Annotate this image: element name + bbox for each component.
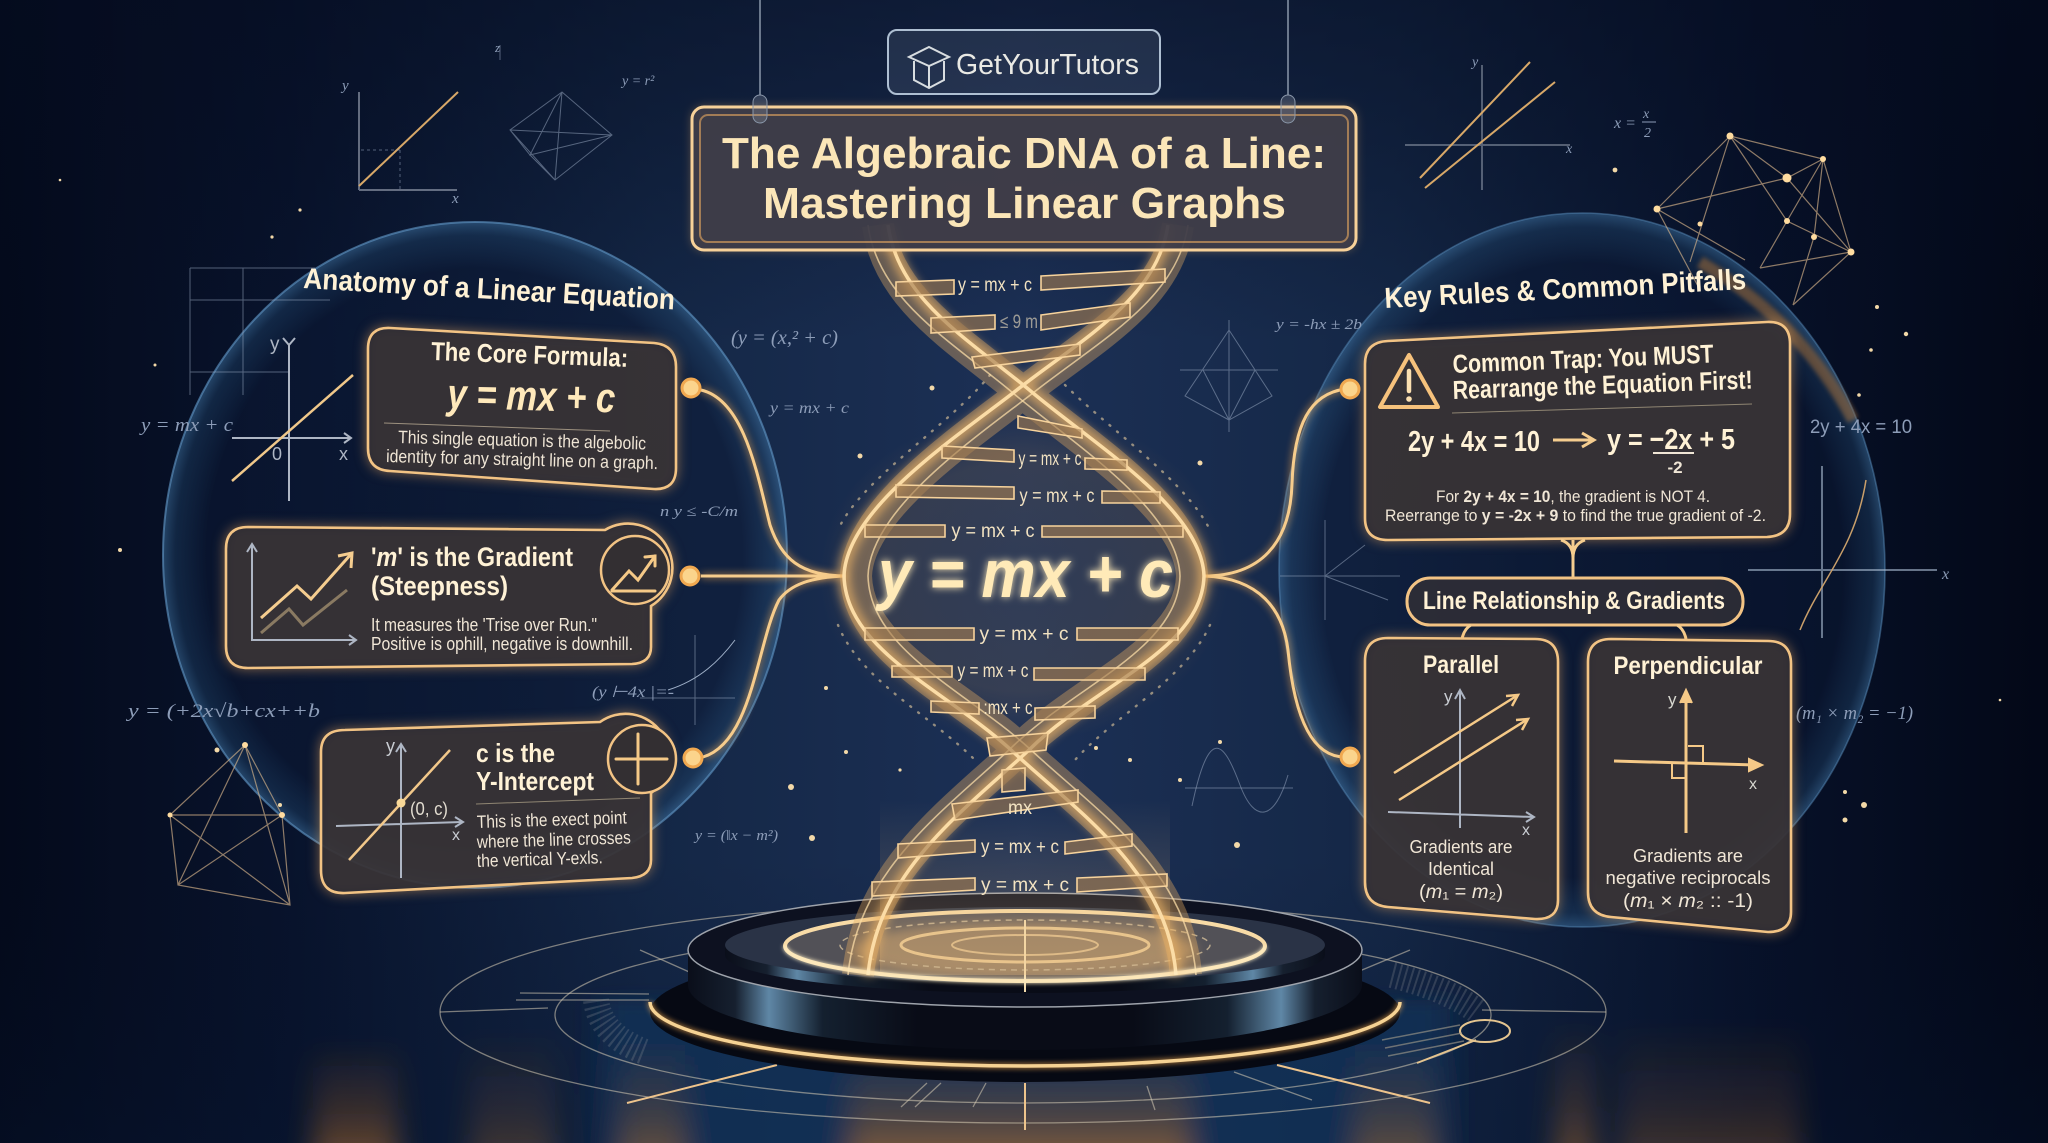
pedestal	[650, 893, 1400, 1082]
icon: warning triangle	[1380, 355, 1438, 407]
helix central glow	[819, 411, 1229, 741]
heading: Anatomy of a Linear Equation	[303, 263, 676, 316]
connector dot: relationships	[1341, 748, 1359, 766]
wireframe bottom left	[168, 742, 290, 905]
card: gradient: Positive is ophill, negative is downhill.	[371, 634, 633, 654]
card: common trap: Rearrange the Equation First!	[1452, 365, 1753, 405]
formula labels: y = r²	[620, 74, 655, 89]
graph top right: y	[1470, 55, 1479, 70]
strand highlights	[844, 225, 1204, 975]
base tier	[650, 942, 1400, 1082]
equation: -2	[1667, 458, 1683, 477]
card: common trap	[1365, 322, 1790, 540]
card: parallel: Parallel	[1423, 651, 1499, 679]
card: perpendicular	[1588, 639, 1791, 932]
card: parallel: Gradients are	[1410, 837, 1512, 857]
card: gradient: It measures the 'Trise over Run."	[371, 615, 597, 635]
title hanging wires	[753, 0, 1295, 123]
particles	[59, 168, 2001, 848]
connector: trap to relationships	[1561, 540, 1585, 578]
formula labels: n y ≤ -C/m	[660, 504, 738, 520]
sphere graph: y	[270, 334, 280, 355]
card: y-intercept: y	[386, 736, 395, 756]
platform ring front	[785, 946, 1265, 981]
panel: anatomy of a linear equation	[226, 263, 702, 893]
graph right: x	[1941, 566, 1949, 583]
sphere: right	[1279, 213, 1885, 927]
connector: pill to perpendicular	[1677, 625, 1686, 639]
card: common trap: Reerrange to y = -2x + 9 to find the true gradient of -2.	[1385, 506, 1766, 525]
card: y-intercept: This is the exect point	[477, 808, 627, 832]
card: parallel: x	[1522, 822, 1530, 839]
card: gradient: 'm' is the Gradient	[371, 542, 573, 572]
card: perpendicular: y	[1668, 690, 1677, 709]
card: parallel: y	[1444, 687, 1453, 706]
cross axis right	[1280, 520, 1400, 620]
card: common trap: For 2y + 4x = 10, the gradient is NOT 4.	[1436, 487, 1710, 506]
floor reflection	[313, 1000, 1800, 1143]
title text: The Algebraic DNA of a Line:	[722, 129, 1326, 178]
formula labels: z	[494, 40, 500, 55]
rung labels: y = mx + c	[958, 275, 1032, 296]
rung labels: mx	[1008, 798, 1032, 819]
formula labels: x =	[1613, 115, 1636, 132]
card: y-intercept: where the line crosses	[476, 827, 631, 852]
strand band	[856, 225, 1192, 975]
icon: graduation cap box	[909, 47, 949, 88]
connector dot: intercept	[684, 749, 702, 767]
strand glow	[844, 225, 1204, 975]
rungs	[865, 269, 1183, 896]
DNA helix	[819, 225, 1229, 975]
rung labels: y = mx + c	[952, 521, 1034, 542]
card: perpendicular: x	[1749, 776, 1757, 793]
equation	[1408, 424, 1735, 477]
title panel	[692, 107, 1356, 250]
chart: perpendicular lines	[1614, 690, 1762, 833]
card: y-intercept: Y-Intercept	[476, 766, 594, 796]
rung labels: y = mx + c	[981, 837, 1059, 858]
card: core formula	[368, 328, 676, 489]
pill: line relationship: Line Relationship & Gradients	[1423, 587, 1725, 615]
icon: axes circle	[608, 725, 676, 793]
sine graph	[1185, 748, 1293, 812]
card: parallel	[1365, 638, 1558, 919]
background math decorations	[125, 40, 1949, 905]
chart: intercept	[336, 744, 463, 878]
card: gradient	[226, 524, 672, 668]
graph top left	[340, 78, 459, 207]
card: y-intercept: (0, c)	[410, 799, 448, 819]
formula labels: 2	[1644, 126, 1651, 141]
card: perpendicular: (m₁ × m₂ :: -1)	[1623, 891, 1753, 912]
sphere: left	[163, 222, 787, 888]
grid left	[190, 268, 330, 395]
formula labels: x	[1642, 107, 1650, 122]
connectors: left	[701, 390, 846, 757]
formula labels: (y = (x,² + c)	[731, 327, 838, 349]
rung labels: y = mx + c	[980, 624, 1068, 645]
card: perpendicular: Perpendicular	[1614, 652, 1763, 680]
pill: line relationship	[1407, 578, 1743, 625]
formula labels	[125, 40, 1913, 844]
graph right	[1748, 466, 1949, 638]
small graph left	[640, 635, 735, 725]
floor rings	[440, 901, 1606, 1130]
formula labels: 2y + 4x = 10	[1810, 417, 1912, 438]
helix light beams	[880, 800, 1170, 975]
sphere graph: 0	[272, 444, 282, 464]
equation: 2y + 4x = 10	[1408, 426, 1540, 458]
card: perpendicular: negative reciprocals	[1606, 868, 1770, 888]
card: core formula: The Core Formula:	[431, 336, 629, 373]
wireframe top left	[500, 45, 612, 180]
rung labels: :mx + c	[984, 698, 1032, 719]
strand sparkle dots	[838, 375, 1210, 760]
card: gradient: (Steepness)	[371, 571, 508, 601]
equation: y = −2x + 5	[1607, 424, 1735, 456]
connector dot: gradient	[681, 567, 699, 585]
card: common trap: Common Trap: You MUST	[1452, 339, 1714, 379]
connectors: right	[1204, 389, 1345, 757]
graph top left: x	[451, 191, 459, 207]
sphere graph: x	[339, 444, 348, 464]
sphere rim highlight: right	[1700, 262, 1853, 420]
card: core formula: This single equation is the algebolic	[398, 427, 646, 453]
card: parallel: Identical	[1428, 859, 1494, 879]
card: parallel: (m₁ = m₂)	[1419, 882, 1503, 903]
top tier	[725, 945, 1325, 993]
rung labels: y = mx + c	[1020, 486, 1094, 507]
formula labels: y = (+2x√b+cx++b	[125, 701, 320, 722]
wireframe top right	[1654, 132, 1854, 305]
graph top left: y	[340, 78, 349, 94]
title panel: Mastering Linear Graphs	[763, 179, 1286, 228]
graph top right: x	[1565, 142, 1573, 157]
card: y-intercept: c is the	[476, 738, 555, 768]
middle tier	[688, 950, 1362, 1050]
graph top right	[1405, 55, 1573, 190]
sphere graph	[232, 334, 353, 501]
rung labels: y = mx + c	[981, 875, 1069, 896]
card: y-intercept: x	[452, 827, 460, 844]
small diamond	[1180, 320, 1278, 432]
heading: Key Rules & Common Pitfalls	[1384, 264, 1747, 315]
platform rings	[785, 911, 1265, 981]
central equation: y = mx + c	[875, 536, 1173, 612]
chart: parallel lines	[1388, 690, 1534, 828]
rung labels: ≤ 9 m	[1000, 312, 1038, 333]
icon: gradient circle	[601, 536, 669, 604]
connector dot: trap	[1341, 380, 1359, 398]
card: y-intercept: the vertical Y-exls.	[477, 847, 603, 871]
connector: pill to parallel	[1462, 625, 1471, 639]
logo badge	[888, 30, 1160, 94]
connector dot: core	[682, 379, 700, 397]
rung labels	[952, 275, 1094, 896]
card: perpendicular: Gradients are	[1633, 846, 1743, 866]
chart: rising zigzag	[247, 544, 356, 645]
card: core formula: identity for any straight line on a graph.	[386, 446, 658, 473]
formula labels: y = mx + c	[768, 400, 849, 417]
formula labels: (m₁ × m₂ = −1)	[1796, 703, 1913, 724]
card: y-intercept	[321, 714, 676, 893]
formula labels: y = (‖x − m²)	[693, 828, 778, 844]
rung labels: y = mx + c	[1018, 449, 1082, 470]
panel: key rules and pitfalls	[1341, 264, 1791, 932]
card: core formula: y = mx + c	[445, 370, 616, 421]
formula labels: y = mx + c	[139, 415, 234, 436]
brand name: GetYourTutors	[956, 49, 1139, 81]
formula labels: (y ⊢4x |=-	[592, 684, 674, 701]
formula labels: y = -hx ± 2b	[1274, 317, 1363, 333]
rung labels: y = mx + c	[958, 661, 1028, 682]
